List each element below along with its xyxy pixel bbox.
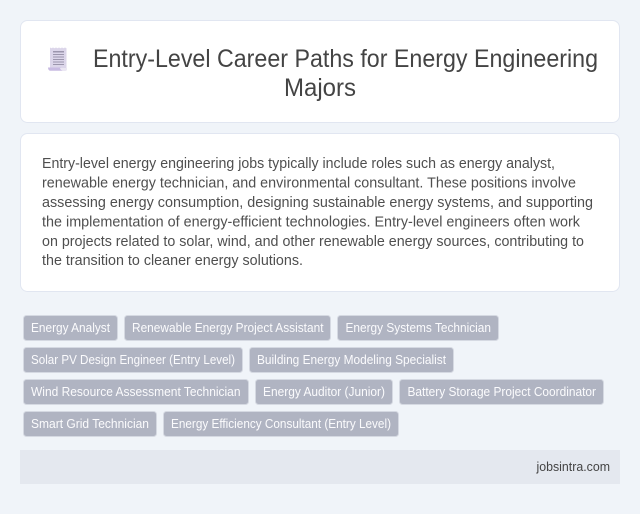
tag: Wind Resource Assessment Technician [24,380,248,404]
footer site name: jobsintra.com [536,460,610,474]
title: Entry-Level Career Paths for Energy Engineering [93,45,598,73]
tag: Energy Analyst: Energy Analyst [31,321,110,335]
tag: Energy Auditor (Junior): Energy Auditor (Junior) [263,385,385,399]
panel: title card [20,20,620,122]
tag: Energy Auditor (Junior) [256,380,392,404]
tag: Smart Grid Technician [24,412,156,436]
tag: Building Energy Modeling Specialist [250,348,454,372]
tag: Energy Systems Technician [338,316,498,340]
tag: Building Energy Modeling Specialist: Building Energy Modeling Specialist [257,353,446,367]
tag: Solar PV Design Engineer [24,348,242,372]
tag: Solar PV Design Engineer: Solar PV Design Engineer (Entry Level) [31,353,235,367]
tag: Energy Efficiency Consultant: Energy Efficiency Consultant (Entry Level) [171,417,391,431]
icon: document scroll [48,48,67,71]
tag: Renewable Energy Project Assistant: Renewable Energy Project Assistant [132,321,324,335]
tag: Energy Analyst [24,316,118,340]
tag: Renewable Energy Project Assistant [124,316,330,340]
footer bar [20,450,620,484]
text block: description paragraph: on projects related to solar, wind, and other renewable energy sources, contributing to [42,234,584,250]
title: Majors [284,74,356,102]
tag: Battery Storage Project Coordinator [400,380,604,404]
text block: description paragraph: renewable energy technician, and environmental consultant. These positions involve [42,176,576,192]
tag list: career paths [24,316,604,436]
text block: description paragraph: Entry-level energy engineering jobs typically include roles such as energy analyst, [42,156,555,172]
tag: Wind Resource Assessment Technician: Wind Resource Assessment Technician [31,385,241,399]
text block: description paragraph: the implementation of energy-efficient technologies. Entry-level engineers often work [42,214,581,230]
text block: description paragraph [42,156,593,269]
title [93,45,598,102]
tag: Energy Efficiency Consultant [164,412,398,436]
text block: description paragraph: assessing energy consumption, designing sustainable energy systems, and supporting [42,195,593,211]
tag: Energy Systems Technician: Energy Systems Technician [346,321,491,335]
panel: description [20,134,620,292]
text block: description paragraph: the transition to cleaner energy solutions. [42,253,303,269]
tag: Smart Grid Technician: Smart Grid Technician [31,417,149,431]
tag: Battery Storage Project Coordinator: Battery Storage Project Coordinator [408,385,596,399]
